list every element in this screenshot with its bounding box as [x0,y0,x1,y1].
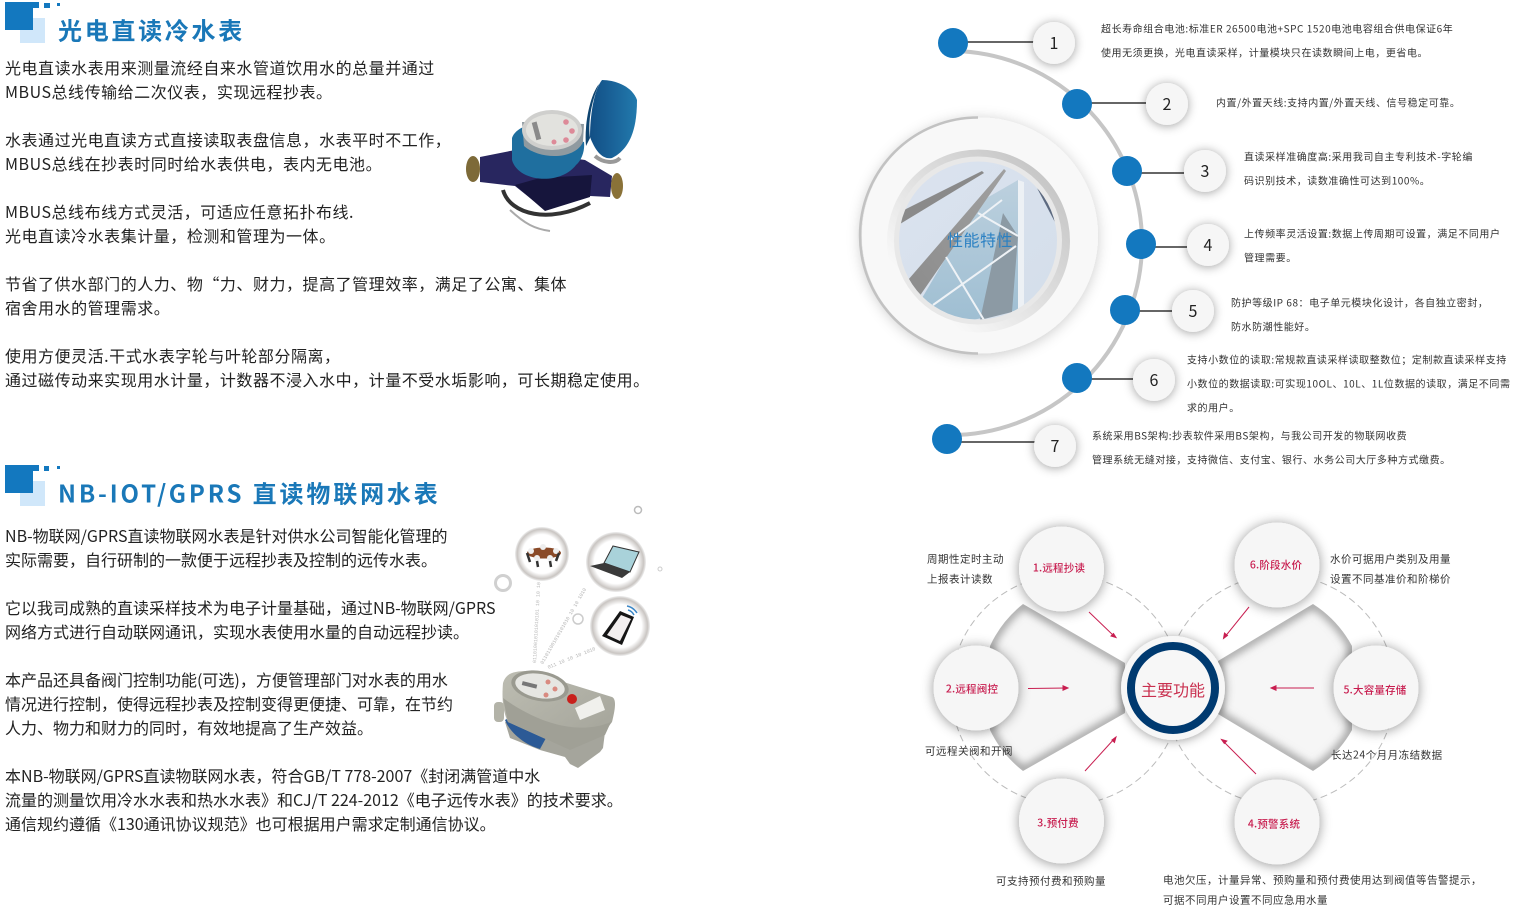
captions: 周期性定时主动 [927,552,1004,566]
arrows [1028,607,1314,774]
section: NB-IOT/GPRS meter [5,465,662,835]
captions: 长达24个月月冻结数据 [1331,748,1443,762]
item 5: 5 [1189,298,1198,322]
item 5: 防护等级IP 68：电子单元模块化设计，各自独立密封， [1231,294,1488,310]
captions: 可据不同用户设置不同应急用水量 [1163,892,1328,908]
text block: description: 节省了供水部门的人力、物“力、财力，提高了管理效率，满足了公寓、集体 [5,271,567,295]
heading: 光电直读冷水表: 光电直读冷水表 [58,12,245,46]
item 4 [1126,224,1501,266]
illustration: blue water meter [466,80,637,231]
text block: description: NB-物联网/GPRS直读物联网水表是针对供水公司智能化管理的 [5,523,448,547]
node 1 [1019,526,1104,612]
text block: description: 本NB-物联网/GPRS直读物联网水表，符合GB/T 778-2007《封闭满管道中水 [5,763,540,787]
item 4: 4 [1204,232,1213,256]
right fan [1218,604,1352,771]
heading: NB-IOT/GPRS 直读物联网水表: NB-IOT/GPRS 直读物联网水表 [58,474,441,510]
text block: description: 它以我司成熟的直读采样技术为电子计量基础，通过NB-物联网/GPRS [5,595,496,619]
item 6: 支持小数位的读取:常规款直读采样读取整数位；定制款直读采样支持 [1187,352,1507,366]
captions: 上报表计读数 [927,572,993,586]
central photo circle [860,118,1098,354]
node 1: 1.远程抄读 [1033,560,1085,576]
text block: description: MBUS总线布线方式灵活，可适应任意拓扑布线. [5,199,354,223]
data stream digits: 011 10 10 10 1010 [547,646,596,671]
captions [925,552,1482,908]
node 6 [1234,522,1320,608]
item 3: 直读采样准确度高:采用我司自主专利技术-字轮编 [1244,148,1473,164]
node 4 [1234,780,1320,864]
item 7: 管理系统无缝对接，支持微信、支付宝、银行、水务公司大厅多种方式缴费。 [1092,452,1451,466]
text block: description: MBUS总线在抄表时同时给水表供电，表内无电池。 [5,151,382,175]
item 6: 求的用户。 [1187,400,1240,414]
text block: description: 本产品还具备阀门控制功能(可选)，方便管理部门对水表的用水 [5,667,448,691]
captions: 可支持预付费和预购量 [996,874,1106,888]
item 6: 6 [1150,367,1159,391]
node 2 [934,646,1018,730]
item 1 [938,20,1453,64]
text block: description: 光电直读水表用来测量流经自来水管道饮用水的总量并通过 [5,55,435,79]
item 3: 码识别技术，读数准确性可达到100%。 [1244,172,1430,188]
item 7 [932,424,1451,467]
item 3 [1112,148,1473,192]
text block: description: 光电直读冷水表集计量，检测和管理为一体。 [5,223,336,247]
captions: 水价可据用户类别及用量 [1330,552,1451,566]
icon: heading squares [5,465,60,506]
item 5 [1110,290,1488,334]
text block: description: 实际需要，自行研制的一款便于远程抄表及控制的远传水表。 [5,547,437,571]
text block: description: 流量的测量饮用冷水水表和热水水表》和CJ/T 224-2012《电子远传水表》的技术要求。 [5,787,623,811]
node 6: 6.阶段水价 [1250,558,1302,572]
item 1: 超长寿命组合电池:标准ER 26500电池+SPC 1520电池电容组合供电保证6年 [1101,20,1453,36]
illustration: grey NB-IoT meter [494,666,615,768]
text block: description: 情况进行控制，使得远程抄表及控制变得更便捷、可靠，在节约 [5,691,453,715]
node 5 [1334,646,1418,730]
text block: description: 使用方便灵活.干式水表字轮与叶轮部分隔离， [5,343,341,367]
text block: description: 人力、物力和财力的同时，有效地提高了生产效益。 [5,715,373,739]
item 6 [1062,352,1510,414]
text block: description [5,523,623,835]
item 2: 2 [1163,91,1172,115]
item 7: 7 [1051,433,1060,457]
item 7: 系统采用BS架构:抄表软件采用BS架构，与我公司开发的物联网收费 [1092,428,1407,442]
center title: 性能特性 [947,227,1013,251]
panel: main functions [925,522,1482,908]
item 1: 使用无须更换，光电直读采样，计量模块只在读数瞬间上电，更省电。 [1101,44,1428,60]
data stream digits: 011010010101010101 10 10 10 [532,582,542,663]
dashed rings [951,575,1395,805]
text block: description: 宿舍用水的管理需求。 [5,295,170,319]
data stream digits: 011011001010101010 10 10 1010 [539,587,588,666]
text block: description [5,55,650,391]
item 4: 管理需要。 [1244,250,1297,264]
panel: performance features [860,20,1510,467]
icon: heading squares [5,2,60,43]
text block: description: MBUS总线传输给二次仪表，实现远程抄表。 [5,79,333,103]
item 5: 防水防潮性能好。 [1231,318,1315,334]
captions: 可远程关阀和开阀 [925,744,1013,758]
center hub [1121,636,1225,740]
item 6: 小数位的数据读取:可实现10OL、10L、1L位数据的读取，满足不同需 [1187,376,1510,390]
node 3: 3.预付费 [1037,816,1079,830]
item 2: 内置/外置天线:支持内置/外置天线、信号稳定可靠。 [1216,94,1460,110]
illustration: bubbles with devices and data stream [496,506,662,671]
timeline arc [945,51,1142,435]
center hub: 主要功能 [1141,677,1205,701]
item 4: 上传频率灵活设置:数据上传周期可设置，满足不同用户 [1244,226,1501,240]
node 2: 2.远程阀控 [946,682,998,696]
item 1: 1 [1050,30,1058,54]
text block: description: 通信规约遵循《130通讯协议规范》也可根据用户需求定制通信协议。 [5,811,496,835]
left fan [990,604,1125,771]
node 4: 4.预警系统 [1248,816,1300,832]
captions: 电池欠压，计量异常、预购量和预付费使用达到阀值等告警提示， [1163,872,1482,888]
text block: description: 通过磁传动来实现用水计量，计数器不浸入水中，计量不受水垢影响，可长期稳定使用。 [5,367,650,391]
section: photoelectric direct-reading cold water meter [5,2,650,391]
node 3 [1019,778,1104,864]
item 3: 3 [1201,158,1209,182]
node 5: 5.大容量存储 [1343,682,1407,698]
item 2 [1062,83,1460,125]
text block: description: 水表通过光电直读方式直接读取表盘信息，水表平时不工作， [5,127,451,151]
captions: 设置不同基准价和阶梯价 [1330,572,1451,586]
data stream digits [532,582,596,671]
text block: description: 网络方式进行自动联网通讯，实现水表使用水量的自动远程抄读。 [5,619,469,643]
